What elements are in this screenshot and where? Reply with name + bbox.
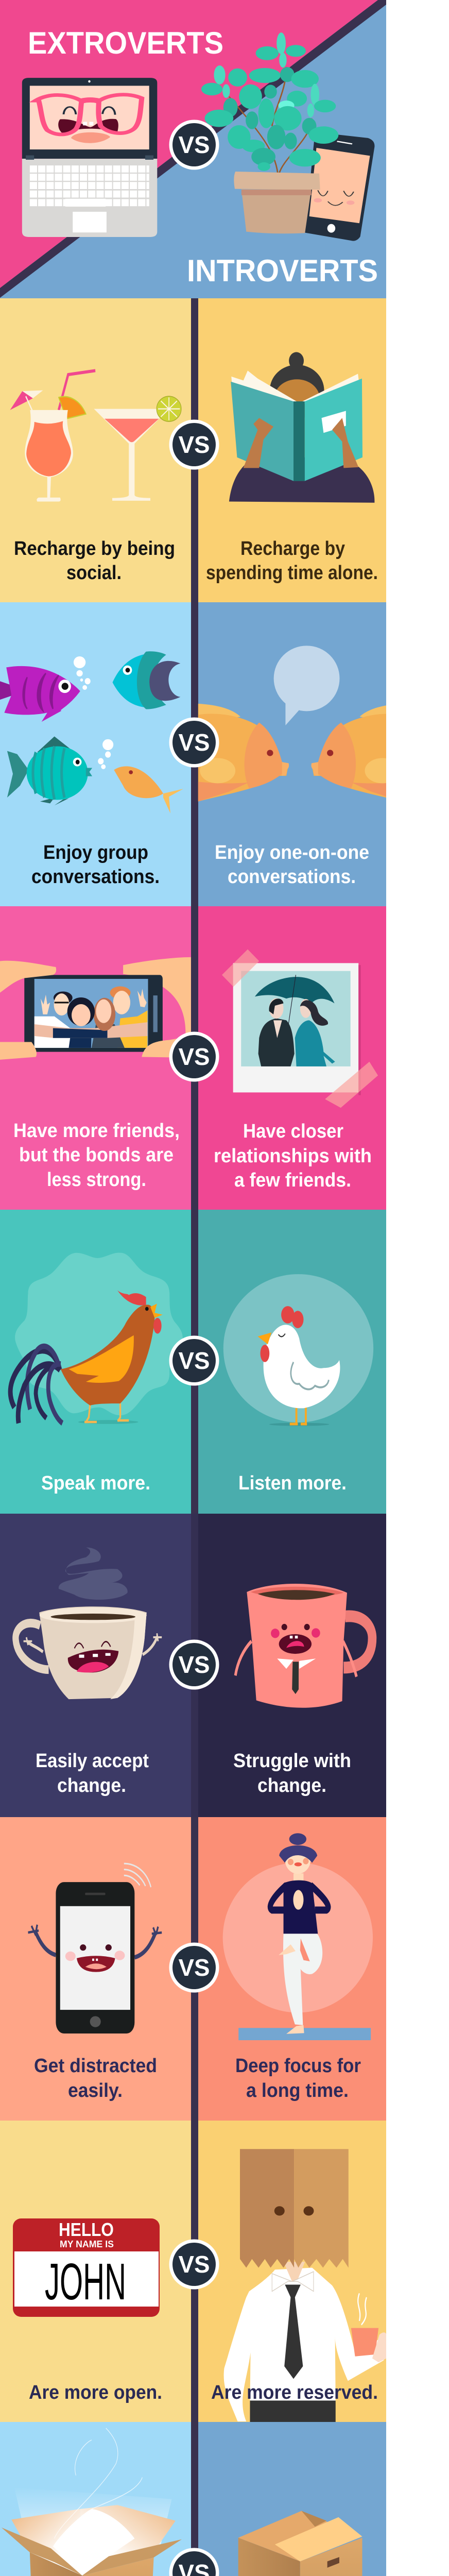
- icon: man with paper bag on head: [224, 2149, 386, 2428]
- text: easily accept change: change.: [57, 1775, 126, 1797]
- icon: two fish talking: [198, 646, 402, 802]
- text: have more friends: less strong.: [47, 1169, 146, 1191]
- icon: phone selfie of friends: [0, 957, 191, 1060]
- vs badge: [169, 1335, 219, 1386]
- text: have closer relationships: a few friends.: [234, 1170, 351, 1191]
- vs badge: VS: [178, 1651, 210, 1678]
- icon: woman in tree pose: [223, 1833, 373, 2040]
- vs badge: VS: [178, 131, 210, 158]
- vs badge: VS: [178, 729, 210, 756]
- panel: row 1 recharge: [0, 298, 386, 602]
- icon: closed box: [238, 2511, 362, 2576]
- icon: rooster: [10, 1252, 183, 1424]
- icon: name tag: JOHN: [45, 2253, 126, 2311]
- text: get distracted easily: [34, 2055, 157, 2102]
- text: recharge by spending time alone: [206, 538, 378, 584]
- vs badge: [169, 1942, 219, 1993]
- icon: name tag: MY NAME IS: [60, 2239, 114, 2249]
- text: easily accept change: Easily accept: [36, 1750, 149, 1772]
- title: extroverts: EXTROVERTS: [28, 26, 223, 60]
- text: have more friends: Have more friends,: [13, 1120, 180, 1142]
- text: easily accept change: [36, 1750, 149, 1797]
- text: get distracted easily: Get distracted: [34, 2055, 157, 2077]
- vs badge: [169, 1031, 219, 1082]
- text: have closer relationships: Have closer: [243, 1121, 343, 1142]
- text: are more reserved: Are more reserved.: [211, 2382, 378, 2403]
- icon: worried mug with tie: [235, 1584, 372, 1708]
- header panel: [0, 0, 386, 298]
- icon: open glowing box: [2, 2428, 182, 2576]
- icon: name tag: [13, 2218, 160, 2317]
- text: have closer relationships: [214, 1121, 372, 1191]
- icon: potted plant with phone: [201, 32, 374, 241]
- icon: polaroid of couple under umbrella: [222, 950, 378, 1108]
- vs badge: [169, 120, 219, 170]
- text: struggle with change: Struggle with: [233, 1750, 351, 1772]
- panel: row 4 speak and listen: [0, 1210, 386, 1514]
- icon: happy coffee cup: [15, 1547, 162, 1699]
- icon: person reading book: [229, 352, 374, 503]
- vs badge: VS: [178, 1954, 210, 1981]
- panel: row 6 focus: [0, 1817, 386, 2121]
- panel: row 2 conversations: [0, 602, 402, 906]
- text: deep focus for a long time: a long time.: [246, 2080, 349, 2102]
- vs badge: [169, 2239, 219, 2290]
- icon: group of fish: [0, 651, 183, 814]
- text: deep focus for a long time: Deep focus for: [235, 2055, 361, 2077]
- text: have more friends: but the bonds are: [19, 1144, 174, 1166]
- text: get distracted easily: easily.: [68, 2080, 123, 2102]
- vs badge: [169, 717, 219, 768]
- vs badge: VS: [178, 1043, 210, 1070]
- text: listen more: Listen more.: [238, 1472, 347, 1494]
- icon: cocktails: [10, 370, 181, 501]
- text: enjoy one-on-one conversations: [215, 842, 369, 888]
- text: recharge by being social: social.: [66, 562, 122, 584]
- text: enjoy group conversations: conversations.: [31, 866, 160, 888]
- text: speak more: Speak more.: [41, 1472, 150, 1494]
- text: enjoy one-on-one conversations: conversations.: [228, 866, 356, 888]
- text: enjoy group conversations: [31, 842, 160, 888]
- vs badge: [169, 2548, 219, 2576]
- panel: row 5 change: [0, 1514, 386, 1817]
- icon: name tag: HELLO: [59, 2219, 114, 2240]
- text: struggle with change: change.: [257, 1775, 326, 1797]
- text: have more friends: [13, 1120, 180, 1191]
- panel: row 7 open and reserved: [0, 2121, 386, 2428]
- panel: row 3 friends: [0, 906, 386, 1210]
- title: introverts: INTROVERTS: [187, 253, 378, 288]
- vs badge: VS: [178, 431, 210, 458]
- vs badge: VS: [178, 1347, 210, 1374]
- text: recharge by being social: Recharge by being: [14, 538, 175, 560]
- icon: laptop with smiling face: [22, 78, 157, 237]
- text: struggle with change: [233, 1750, 351, 1797]
- vs badge: [169, 1639, 219, 1690]
- text: enjoy group conversations: Enjoy group: [43, 842, 148, 863]
- icon: buzzing phone character: [28, 1863, 162, 2033]
- text: recharge by spending time alone: spending time alone.: [206, 562, 378, 584]
- text: recharge by spending time alone: Recharge by: [240, 538, 345, 560]
- text: recharge by being social: [14, 538, 175, 584]
- panel: row 8 open up: [0, 2422, 386, 2576]
- text: deep focus for a long time: [235, 2055, 361, 2102]
- vs badge: [169, 419, 219, 470]
- text: are more open: Are more open.: [29, 2382, 162, 2403]
- icon: hen: [223, 1274, 373, 1426]
- diagonal band: [0, 0, 386, 298]
- text: have closer relationships: relationships with: [214, 1145, 372, 1167]
- vs badge: VS: [178, 2251, 210, 2278]
- text: enjoy one-on-one conversations: Enjoy one-on-one: [215, 842, 369, 863]
